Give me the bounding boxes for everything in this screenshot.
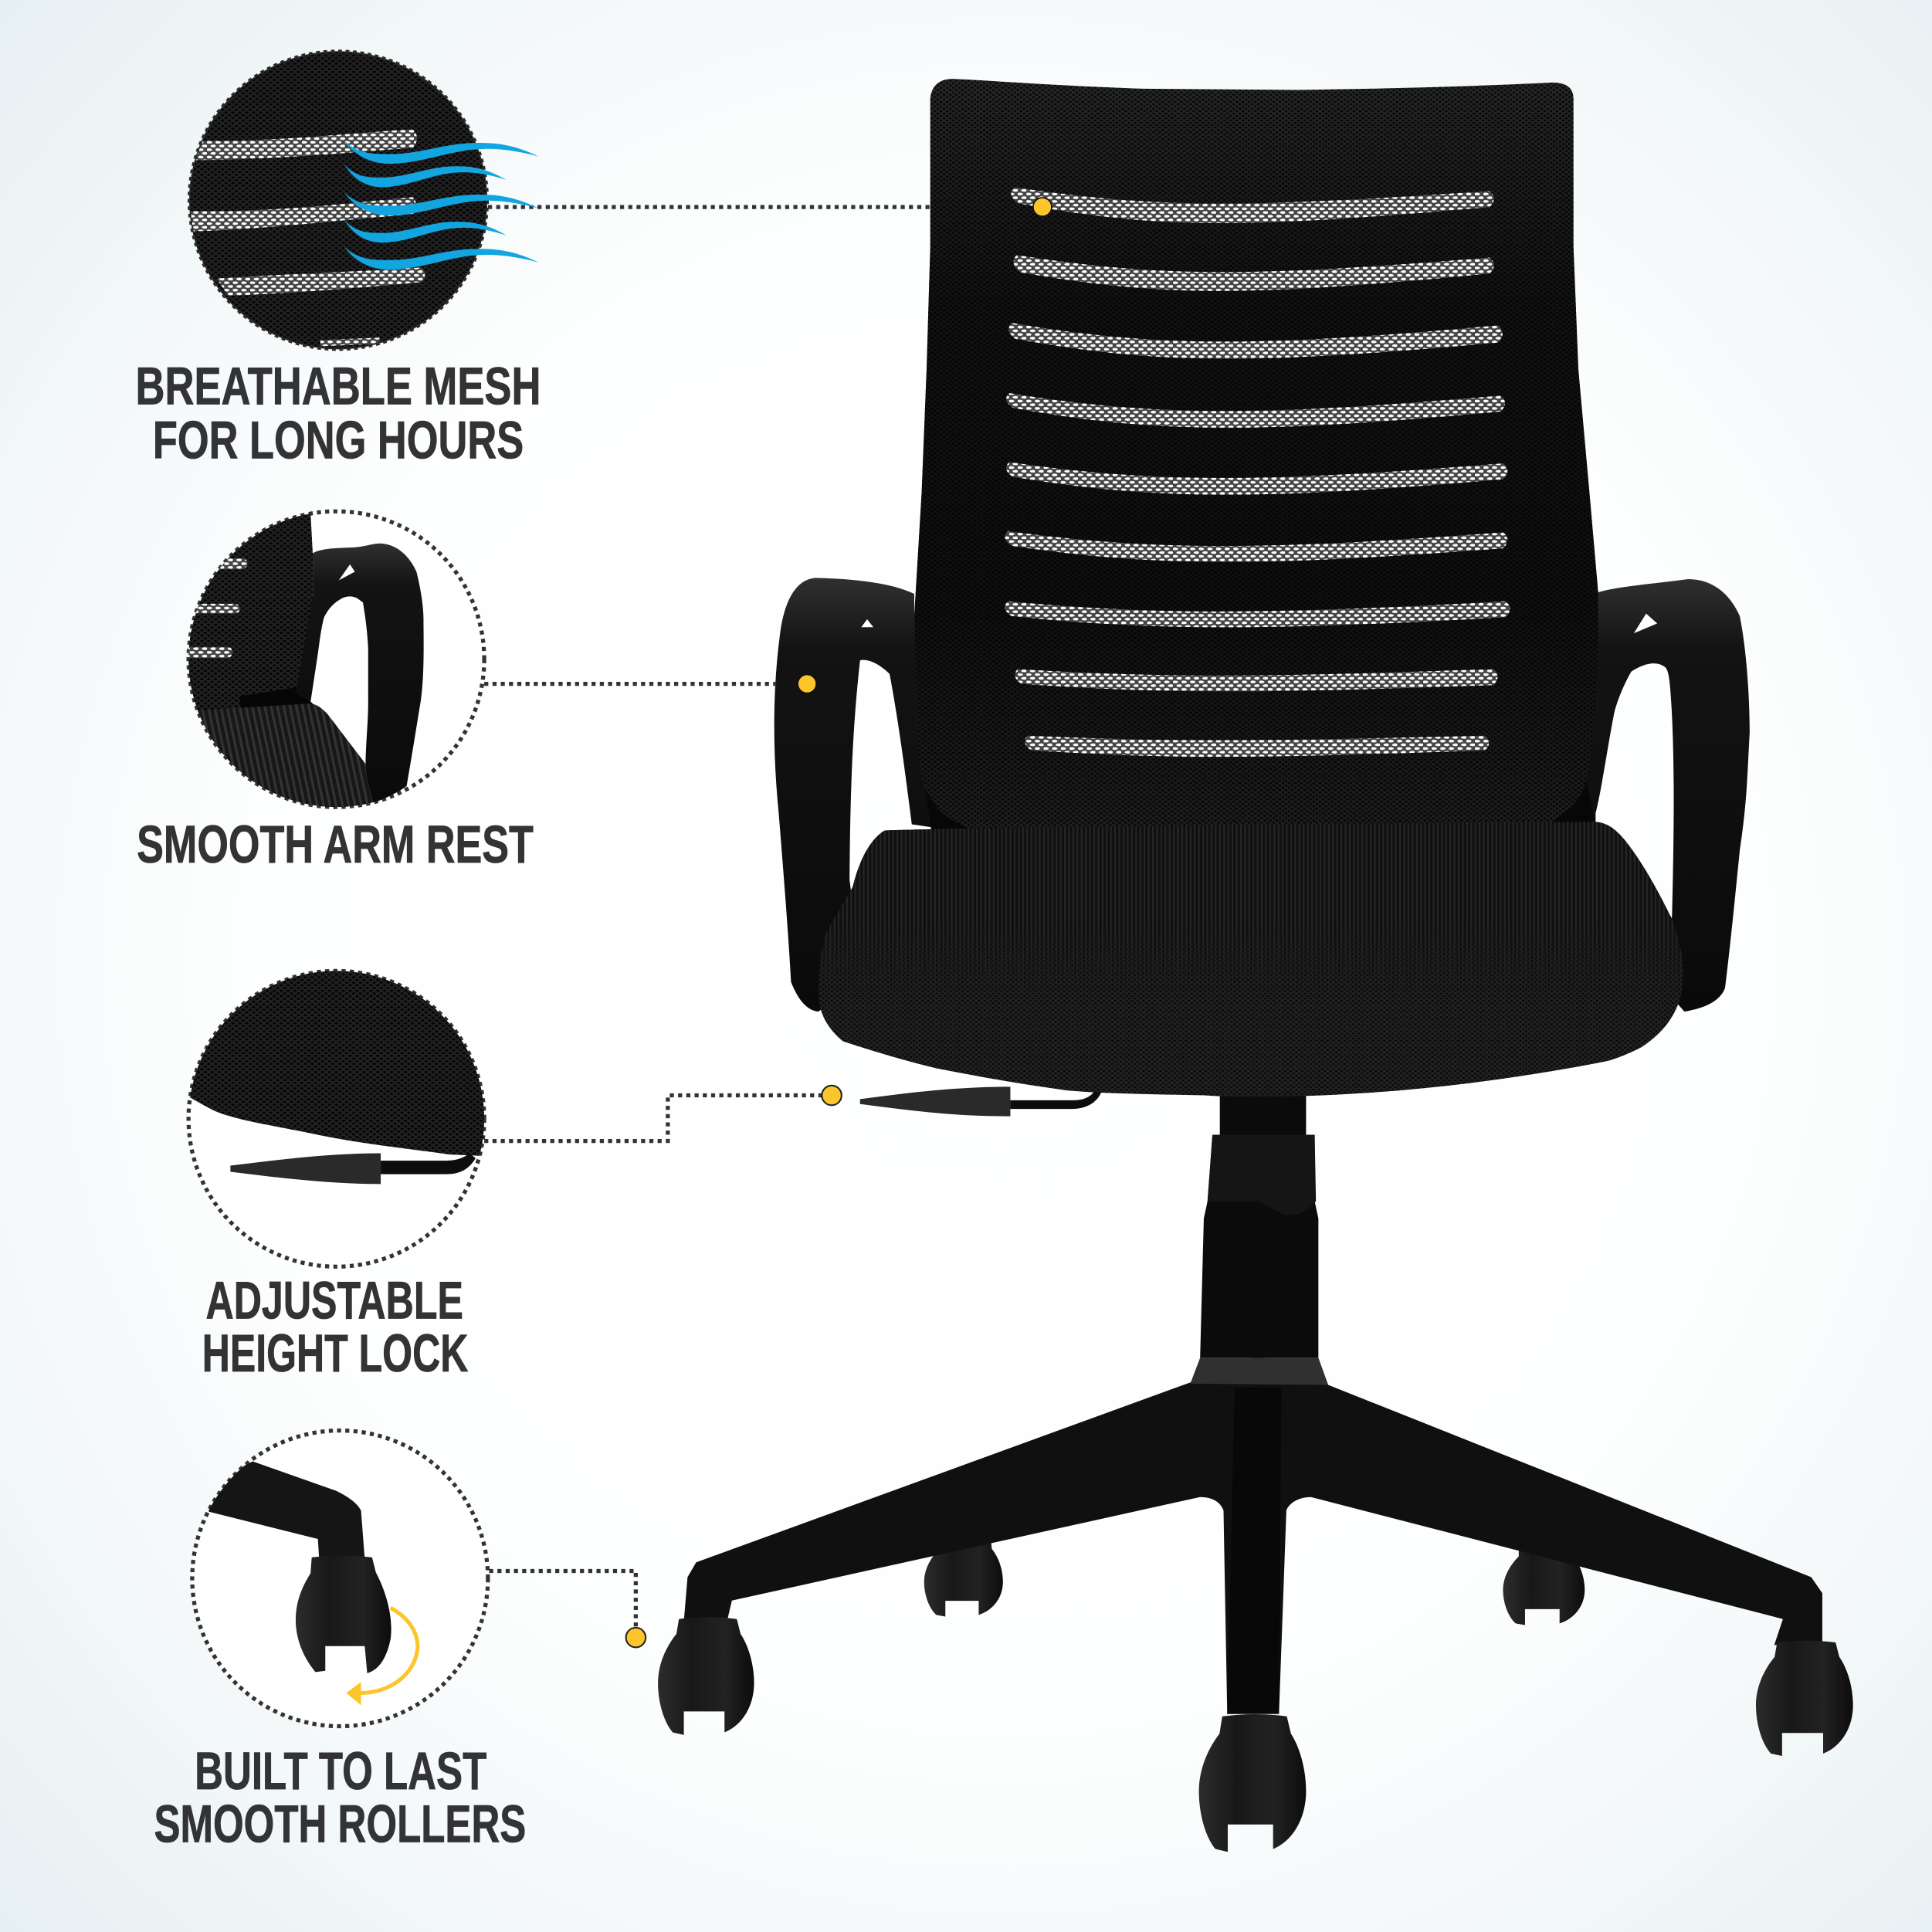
marker: mesh [1033, 198, 1052, 216]
inset: breathable mesh [185, 49, 538, 358]
inset: smooth arm rest [172, 505, 484, 825]
label: breathable mesh: FOR LONG HOURS [153, 411, 524, 470]
label: built to last: BUILT TO LAST [195, 1741, 486, 1801]
leader line: mesh [488, 205, 931, 208]
inset: height lock lever [172, 961, 493, 1266]
leader line: rollers [489, 1571, 636, 1626]
back mesh in inset [188, 514, 314, 714]
column collar ring [1190, 1357, 1328, 1385]
label: built to last [154, 1741, 526, 1854]
label: built to last: SMOOTH ROLLERS [154, 1795, 526, 1854]
inset: smooth rollers [185, 1431, 488, 1727]
label: adjustable height lock: ADJUSTABLE [205, 1270, 463, 1330]
marker: lever [822, 1086, 842, 1105]
icon: blue airflow waves [344, 141, 538, 269]
lever in inset [230, 1154, 381, 1184]
height lever [860, 1086, 1102, 1117]
rear casters [924, 1539, 1585, 1625]
seat in inset [198, 703, 374, 808]
label: breathable mesh: BREATHABLE MESH [136, 356, 541, 415]
left armrest [774, 578, 937, 1012]
front casters [658, 1617, 1853, 1852]
label: breathable mesh [136, 356, 541, 470]
marker: armrest [798, 675, 816, 693]
caster in inset [296, 1556, 391, 1673]
icon: yellow rotation arrow [346, 1608, 418, 1705]
label: adjustable height lock: HEIGHT LOCK [202, 1324, 468, 1383]
armrest in inset [296, 544, 424, 803]
backrest [914, 79, 1598, 840]
chair photo [658, 79, 1853, 1852]
right armrest [1577, 579, 1750, 1012]
chair base with five legs [684, 1355, 1822, 1714]
leader line: lever [484, 1096, 822, 1141]
backrest slats [1005, 188, 1510, 757]
label: adjustable height lock [202, 1270, 468, 1383]
leader line: armrest [484, 683, 776, 685]
label: smooth arm rest: SMOOTH ARM REST [137, 815, 534, 874]
gas lift column [1190, 1090, 1328, 1385]
yellow marker dots and leader lines [484, 198, 1052, 1647]
seat cushion [801, 813, 1700, 1096]
marker: rollers [626, 1628, 646, 1647]
